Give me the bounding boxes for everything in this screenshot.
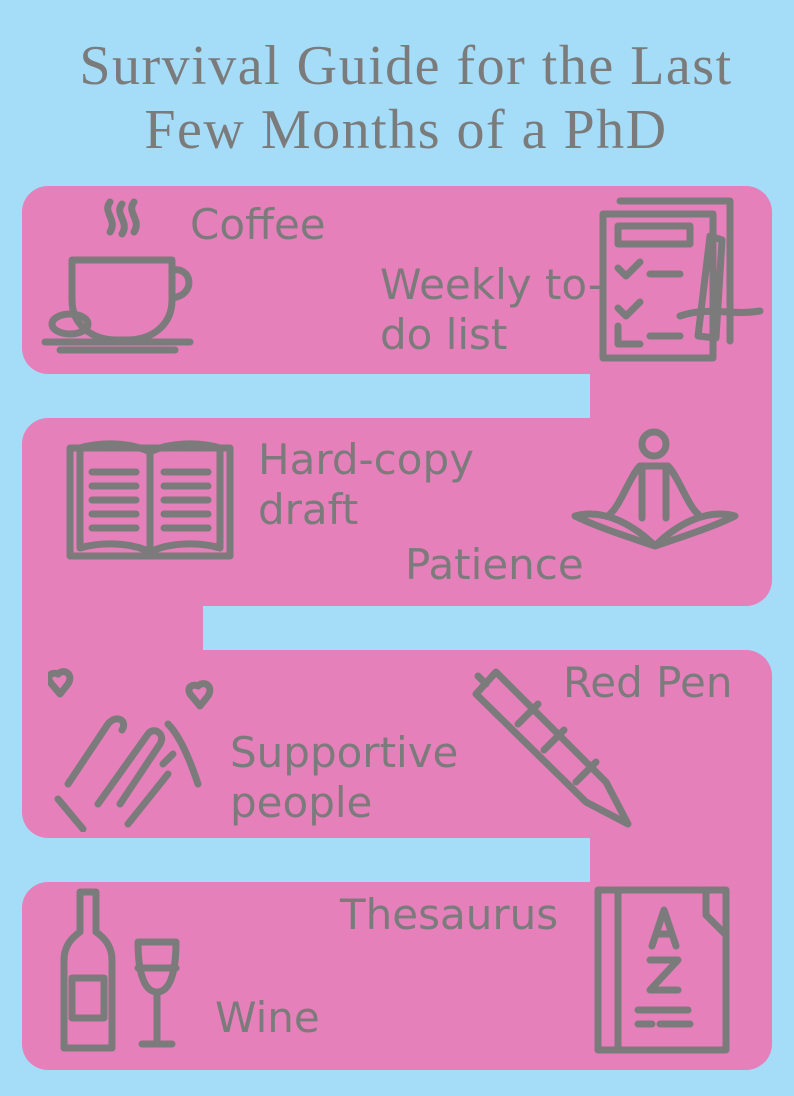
label: hard-copy draft: [258, 435, 474, 534]
label: weekly to-do list: [380, 260, 603, 359]
title: [79, 35, 733, 161]
label: supportive people: Supportive: [230, 728, 458, 777]
label: weekly to-do list: do list: [380, 310, 507, 359]
icon: open book: [66, 440, 234, 560]
label: patience: Patience: [405, 540, 584, 589]
label: wine: Wine: [215, 993, 320, 1042]
label: supportive people: people: [230, 778, 372, 827]
icon: wine: [60, 888, 180, 1052]
label: supportive people: [230, 728, 458, 827]
icon: hands with hearts: [48, 668, 214, 832]
icon: A-Z dictionary: [594, 886, 730, 1054]
icon: meditation: [572, 428, 738, 550]
icon: checklist: [600, 198, 764, 362]
label: coffee: Coffee: [190, 200, 326, 249]
label: hard-copy draft: Hard-copy: [258, 435, 474, 484]
title: Few Months of a PhD: [144, 99, 668, 161]
title: Survival Guide for the Last: [79, 35, 733, 97]
label: thesaurus: Thesaurus: [340, 890, 558, 939]
label: weekly to-do list: Weekly to-: [380, 260, 603, 309]
icon: coffee cup: [42, 198, 194, 354]
icon: pen: [472, 668, 632, 828]
label: red pen: Red Pen: [563, 658, 732, 707]
label: hard-copy draft: draft: [258, 485, 358, 534]
